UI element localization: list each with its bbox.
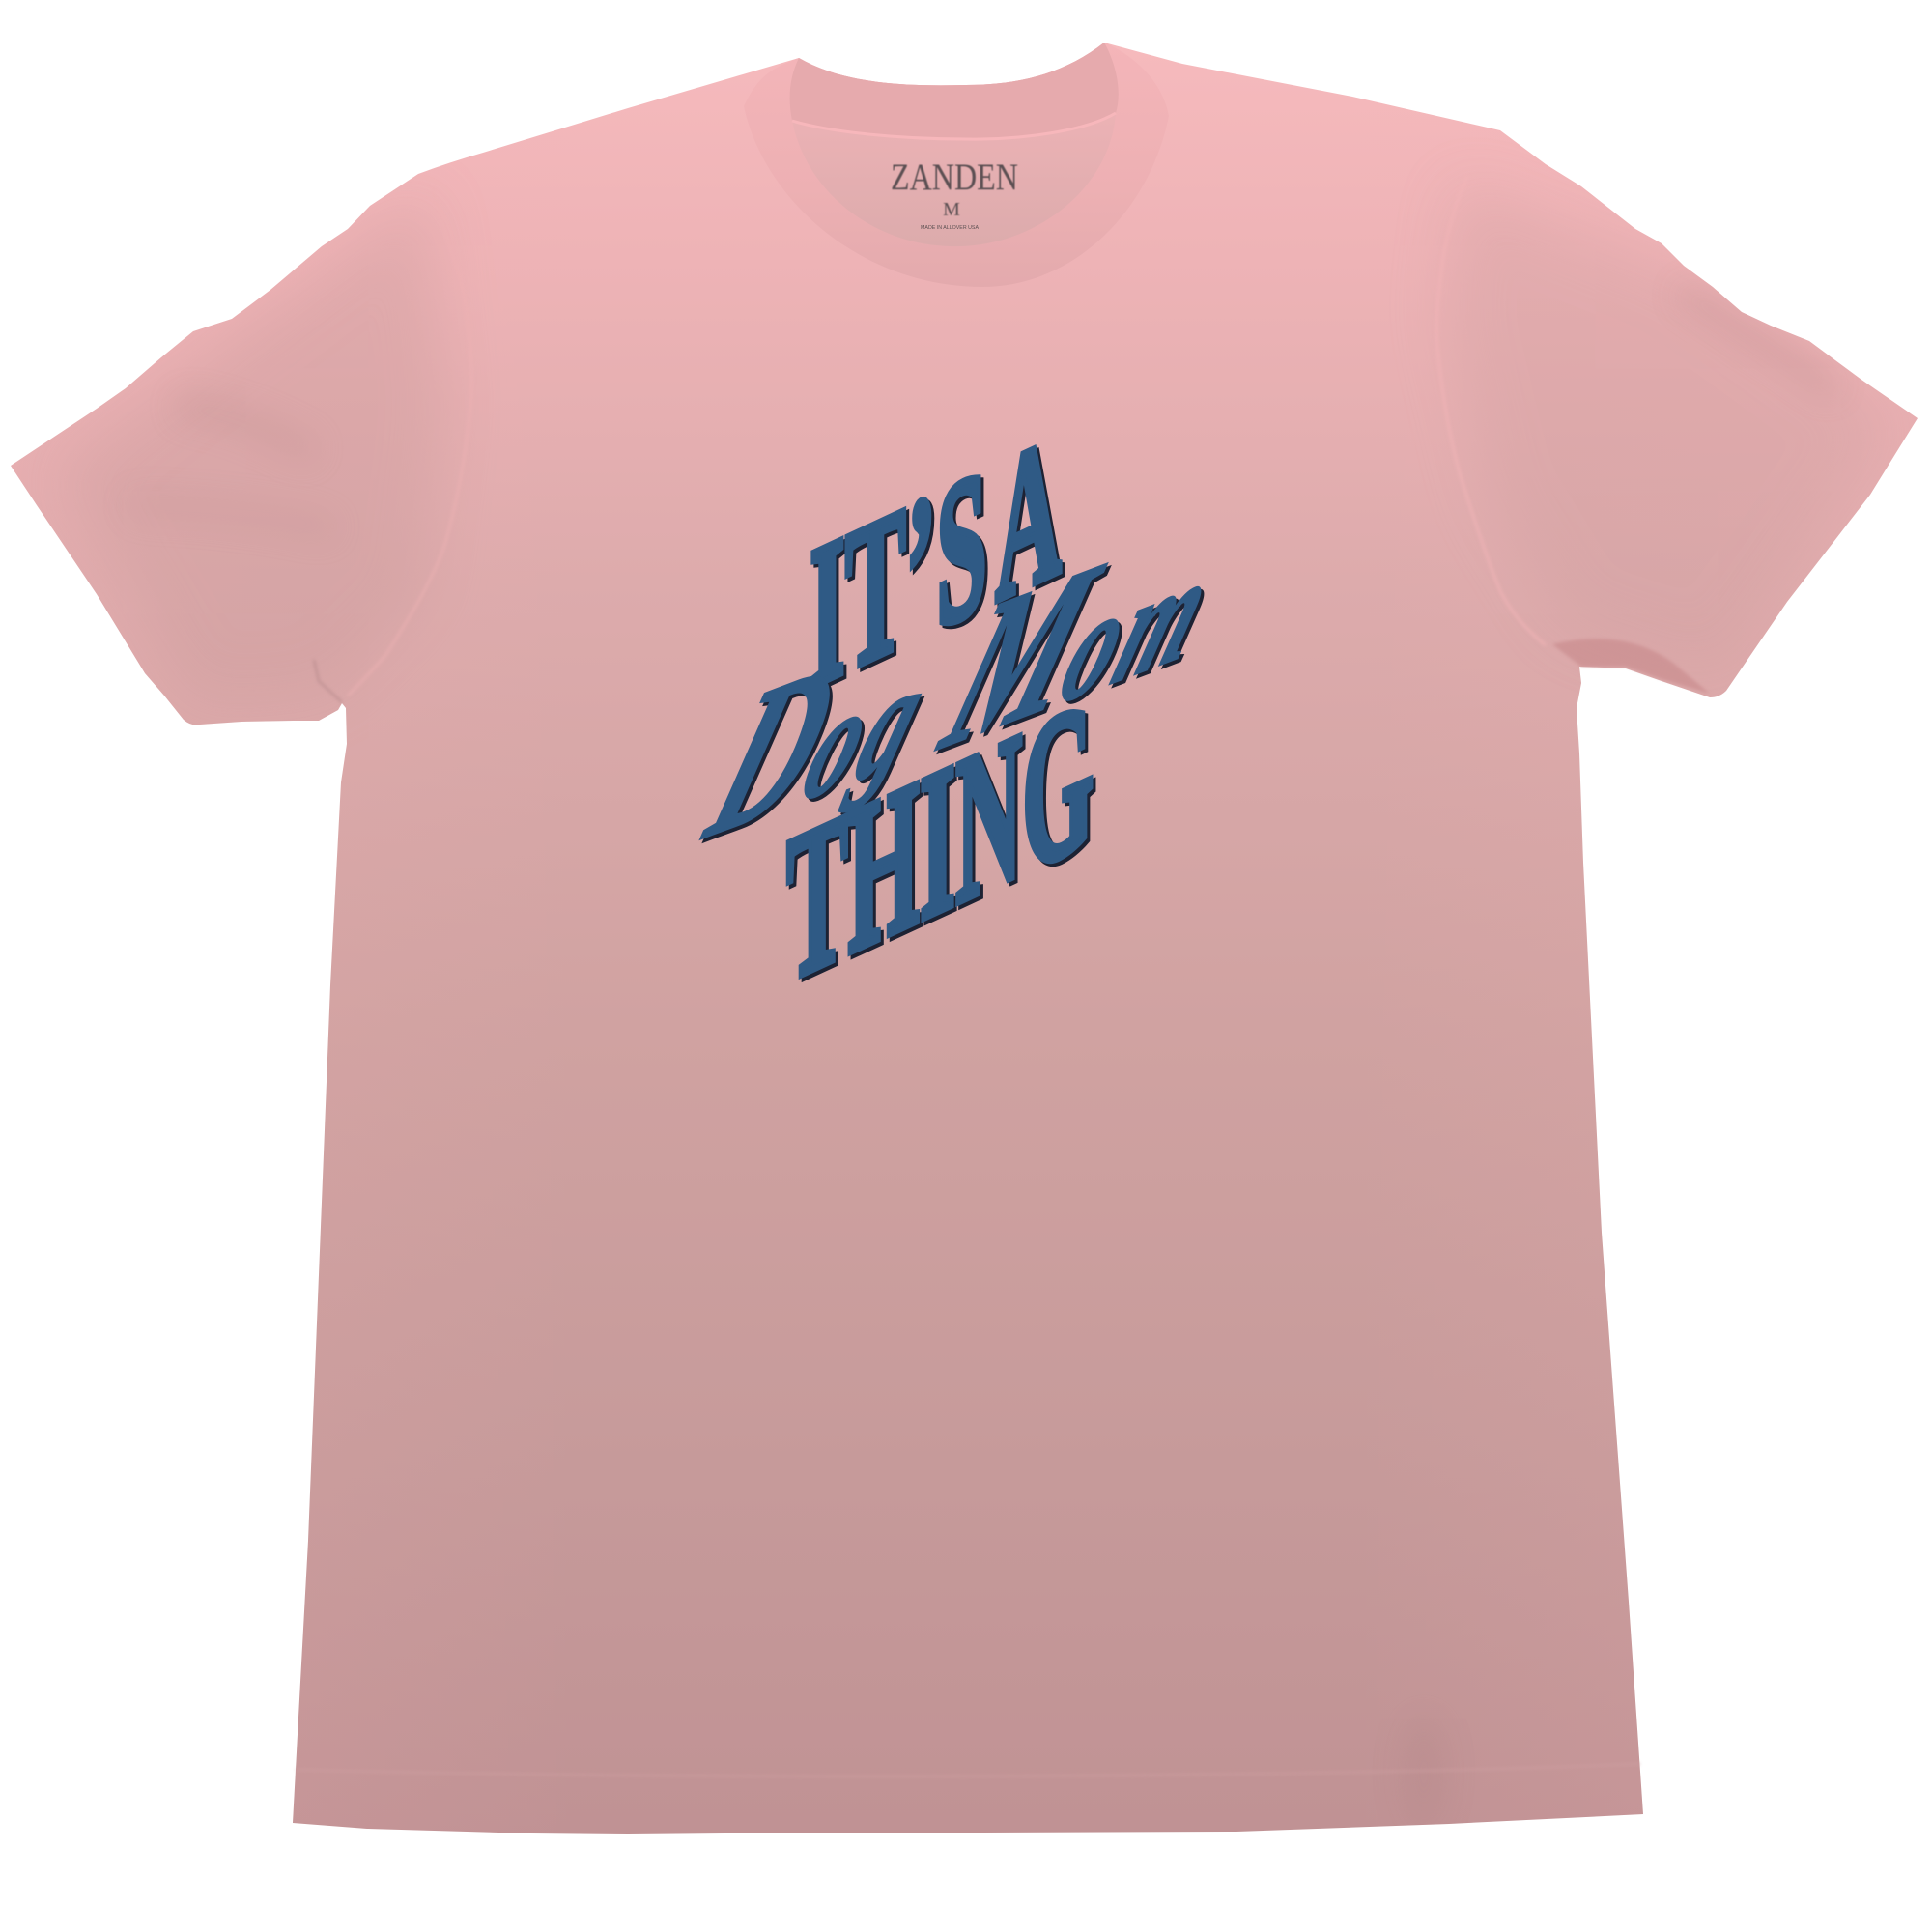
left sleeve seam <box>348 186 471 696</box>
neck label: size: M <box>943 199 960 220</box>
left sleeve cuff fold <box>314 660 342 702</box>
inner back panel <box>792 113 1116 246</box>
right sleeve inner cuff <box>1552 639 1710 694</box>
inner back of neck <box>790 43 1119 139</box>
neck label: small print: MADE IN ALLOVER USA <box>921 225 980 231</box>
slogan line: Dog Mom: Dog Mom <box>684 466 1254 886</box>
hem stitch line <box>296 1764 1640 1776</box>
collar seam <box>792 113 1116 139</box>
slogan graphic <box>684 389 1254 1027</box>
fabric shading <box>111 218 1841 562</box>
collar rib <box>744 43 1169 287</box>
right sleeve seam <box>1436 176 1546 645</box>
slogan line: IT'S A: IT’S A <box>810 389 1062 732</box>
slogan line: THING: THING <box>786 653 1094 1027</box>
neck label: brand: ZANDEN <box>891 156 1018 198</box>
